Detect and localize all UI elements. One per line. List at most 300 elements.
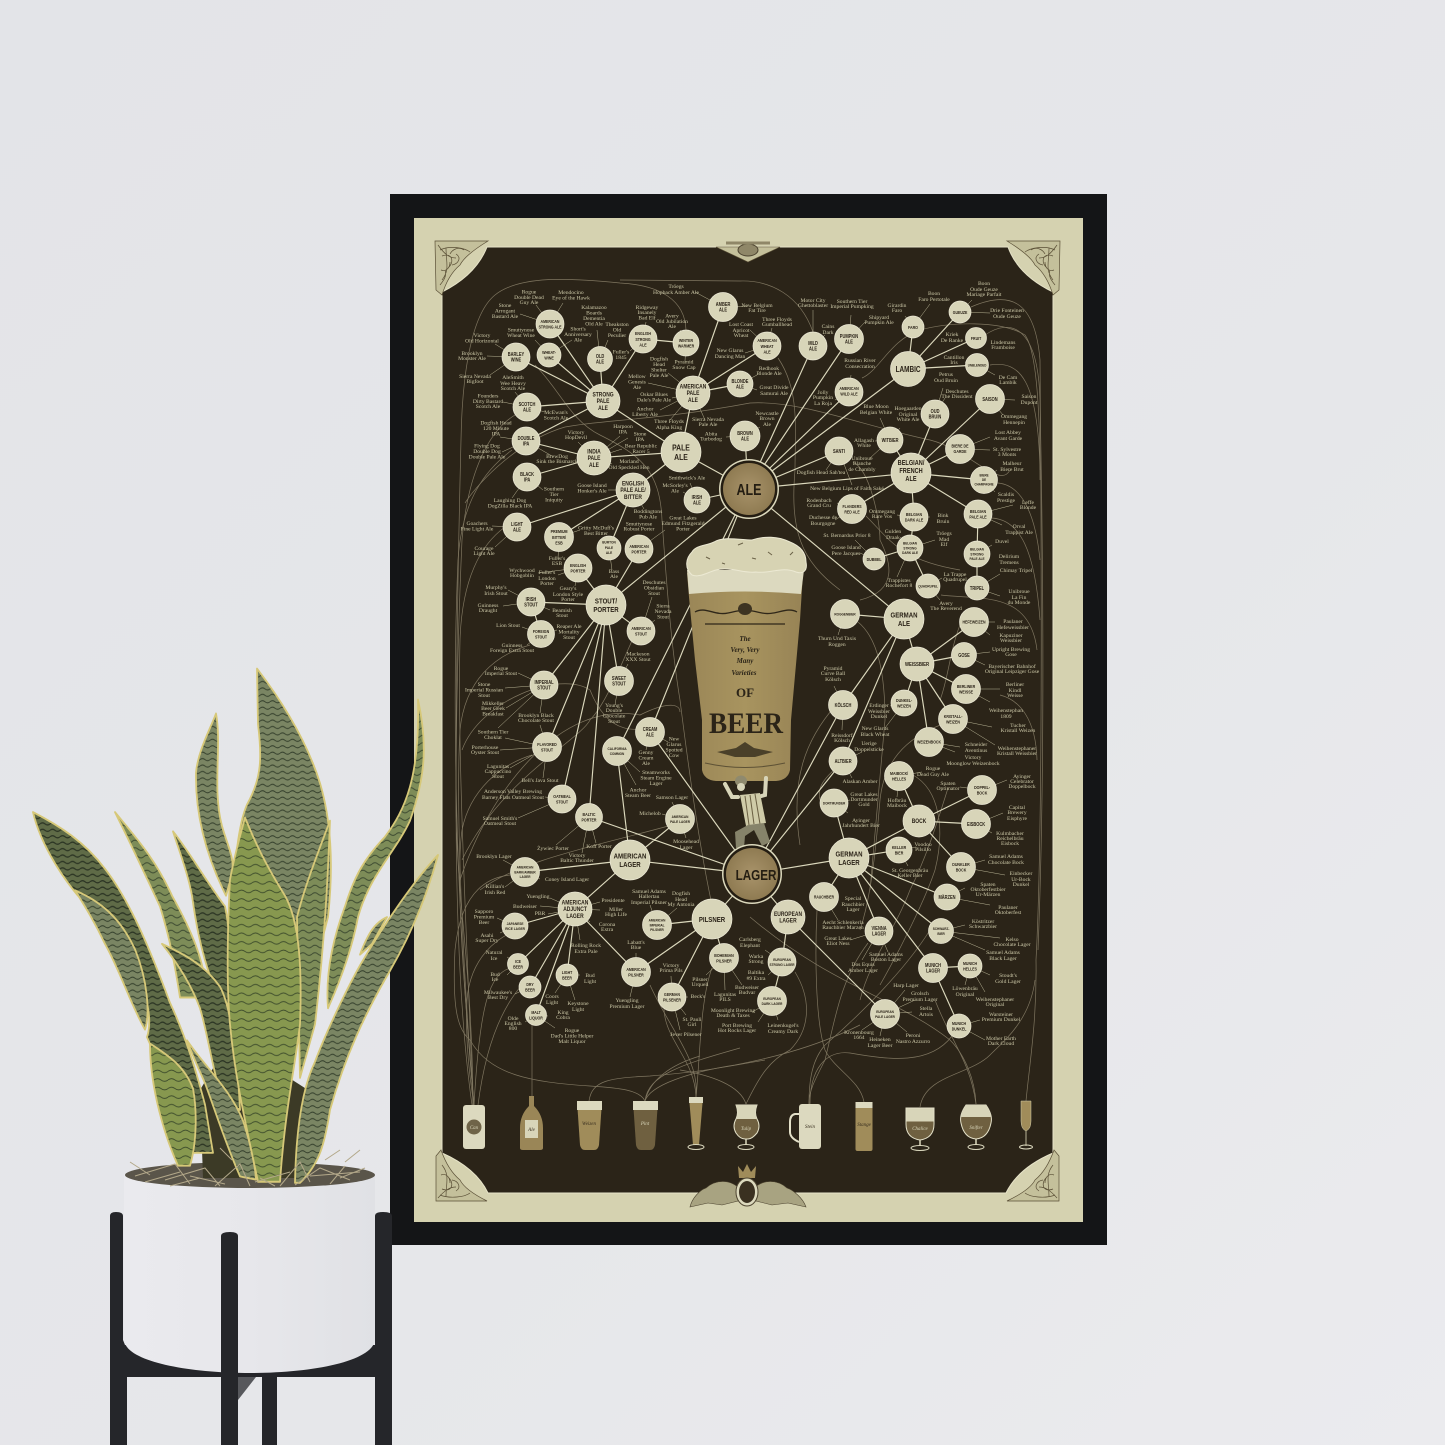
brand labels: belgian and french ales, lambics: Biere Brut bbox=[1000, 467, 1024, 473]
node: Kolsch: KÖLSCH bbox=[835, 701, 851, 708]
brand labels: ale branches upper left: Ale bbox=[671, 488, 680, 494]
brand labels: european and german lagers: Lager bbox=[846, 907, 860, 913]
brand labels: european and german lagers: Kulmbacher bbox=[996, 831, 1024, 837]
brand labels: belgian and french ales, lambics: Cains bbox=[822, 324, 834, 330]
node: Hefeweizen bbox=[960, 608, 988, 636]
brand labels: belgian and french ales, lambics: Avant Garde bbox=[994, 436, 1023, 442]
brand labels: ale branches upper left: Insanely bbox=[638, 310, 657, 316]
brand labels: belgian and french ales, lambics: La Trappe bbox=[944, 572, 967, 578]
potted snake plant bbox=[33, 669, 438, 1445]
brand labels: european and german lagers: Ayinger bbox=[1013, 774, 1031, 780]
brand labels: european and german lagers: Keller Bier bbox=[897, 873, 923, 879]
node: Saison: SAISON bbox=[982, 396, 998, 402]
brand labels: german ales and wheat beers: Berliner bbox=[1006, 682, 1024, 688]
node: Stout/Porter bbox=[586, 585, 626, 625]
brand labels: german ales and wheat beers: Gose bbox=[1005, 652, 1017, 658]
brand labels: european and german lagers: Eisbock bbox=[1001, 841, 1019, 847]
brand labels: stouts and porters: Anderson Valley Brewing bbox=[484, 789, 542, 795]
title text: Many bbox=[736, 657, 754, 665]
node: European Lager: EUROPEAN bbox=[774, 911, 802, 918]
brand labels: belgian and french ales, lambics: Rare Vos bbox=[872, 514, 892, 520]
brand labels: ale branches upper left: Theakston bbox=[605, 322, 629, 328]
brand labels: american lagers and pilsners: Dad's Little Helper bbox=[551, 1034, 593, 1040]
brand labels: belgian and french ales, lambics: Chimay Tripel bbox=[1000, 568, 1033, 574]
brand labels: belgian and french ales, lambics: Motor City bbox=[800, 298, 826, 304]
node: Unblended: UNBLENDED bbox=[968, 363, 987, 368]
corner ornament: top left bbox=[435, 241, 488, 295]
brand labels: ale branches upper left: Bad Elf bbox=[638, 314, 656, 322]
node: Belgian/French Ale: ALE bbox=[905, 475, 917, 483]
brand labels: american lagers and pilsners: Corona bbox=[599, 922, 616, 928]
node: Belgian Strong Dark Ale bbox=[897, 535, 923, 561]
node: Faro bbox=[902, 316, 924, 338]
node: Belgian Strong Dark Ale: DARK ALE bbox=[902, 551, 919, 555]
brand labels: european and german lagers: Black Lager bbox=[989, 956, 1017, 962]
brand labels: american lagers and pilsners: Light bbox=[572, 1007, 585, 1013]
node: Imperial Stout: IMPERIAL bbox=[534, 680, 554, 685]
brand labels: ale branches upper left: Monster Ale bbox=[458, 356, 486, 362]
node: Keller Bier: KELLER bbox=[892, 845, 906, 850]
node: Ice Beer bbox=[508, 954, 528, 974]
node: Belgian Strong Pale Ale bbox=[964, 541, 990, 567]
brand labels: ale branches upper left: Sierra Nevada bbox=[459, 374, 491, 380]
node: European Strong Lager: STRONG LAGER bbox=[770, 962, 795, 967]
brand labels: belgian and french ales, lambics: Rochefort 8 bbox=[886, 582, 912, 589]
node: Irish Ale: ALE bbox=[693, 500, 701, 506]
node: Irish Ale: IRISH bbox=[692, 495, 702, 500]
brand labels: belgian and french ales, lambics: Samurai Ale bbox=[760, 391, 788, 397]
brand labels: belgian and french ales, lambics: Ghettoblaster bbox=[798, 303, 828, 309]
node: Kristallweizen: WEIZEN bbox=[946, 719, 960, 725]
figure legs bbox=[735, 823, 770, 848]
node: Foreign Stout: STOUT bbox=[535, 634, 548, 640]
brand labels: european and german lagers: Dortmunder bbox=[850, 797, 878, 803]
brand labels: american lagers and pilsners: PILS bbox=[719, 997, 731, 1003]
brand labels: ale branches upper left: IPA bbox=[619, 430, 627, 436]
brand labels: american lagers and pilsners: Premium bbox=[474, 914, 495, 920]
brand labels: american lagers and pilsners: Brooklyn Lager bbox=[476, 854, 512, 860]
brand labels: stouts and porters: Oatmeal Stout bbox=[484, 821, 517, 827]
brand labels: ale branches upper left: Goose Island bbox=[577, 483, 607, 489]
glassware row bbox=[463, 1096, 1032, 1151]
node: Barley Wine bbox=[502, 343, 530, 371]
brand labels: ale branches upper left: Light Ale bbox=[473, 551, 495, 557]
brand labels: american lagers and pilsners: Victory bbox=[663, 963, 680, 969]
brand labels: european and german lagers: Brewery bbox=[1007, 810, 1027, 816]
title text: The bbox=[739, 635, 751, 643]
poster mat bbox=[414, 218, 1083, 1222]
brand labels: german ales and wheat beers: Victory bbox=[965, 755, 982, 761]
brand labels: american lagers and pilsners: Rolling Rock bbox=[571, 943, 601, 949]
brand labels: american lagers and pilsners: Strong bbox=[749, 959, 764, 965]
node: English Strong Ale: ALE bbox=[639, 342, 647, 348]
brand labels: german ales and wheat beers: Original Leipziger Gose bbox=[985, 669, 1040, 675]
brand labels: belgian and french ales, lambics: St. Bernardus Prior 8 bbox=[823, 533, 871, 539]
plant pot body bbox=[124, 1174, 375, 1373]
node: European Dark Lager: DARK LAGER bbox=[762, 1001, 783, 1006]
node: American Strong Ale bbox=[536, 310, 564, 338]
node: Dunkelweizen: DUNKEL- bbox=[896, 698, 913, 703]
brand labels: european and german lagers: Amber Lager bbox=[848, 968, 878, 974]
brand labels: ale branches upper left: Wee Heavy bbox=[500, 381, 526, 387]
brand labels: american lagers and pilsners: Beer bbox=[479, 920, 489, 926]
brand labels: american lagers and pilsners: High Life bbox=[605, 911, 627, 918]
node: Light Ale: ALE bbox=[513, 527, 521, 533]
brand labels: stouts and porters: Lager bbox=[679, 845, 693, 851]
brand labels: belgian and french ales, lambics: Pumpkin Ale bbox=[864, 320, 894, 326]
node: California Common: COMMON bbox=[610, 751, 625, 756]
brand labels: ale branches upper left: 120 Minute bbox=[483, 426, 509, 432]
brand labels: belgian and french ales, lambics: New Belgium bbox=[741, 303, 773, 309]
node: Eisbock: EISBOCK bbox=[967, 821, 986, 827]
node: Strong Pale Ale: STRONG bbox=[592, 392, 614, 399]
pot soil bbox=[125, 1162, 375, 1188]
brand labels: american lagers and pilsners: Budweiser bbox=[735, 985, 759, 991]
node: Black IPA: IPA bbox=[524, 477, 531, 483]
brand labels: ale branches upper left: Southern bbox=[544, 486, 564, 492]
node: American Barkamber Lager bbox=[510, 858, 540, 886]
brand labels: ale branches upper left: Great Lakes bbox=[669, 516, 697, 522]
node: Strong Pale Ale: PALE bbox=[597, 399, 610, 405]
node: Flanders Red Ale bbox=[838, 494, 866, 524]
brand labels: belgian and french ales, lambics: Lindemans bbox=[991, 340, 1015, 346]
node: Barley Wine: BARLEY bbox=[508, 352, 524, 357]
node: American Wheat Ale: ALE bbox=[763, 349, 771, 355]
brand labels: european and german lagers: Grolsch bbox=[911, 991, 929, 997]
icon: bottle: Ale bbox=[527, 1128, 536, 1133]
soil twigs bbox=[130, 1148, 365, 1186]
node: American Pale Ale: AMERICAN bbox=[680, 384, 706, 391]
node: Belgian/French Ale: BELGIAN/ bbox=[898, 459, 925, 467]
brand labels: european and german lagers: Chocolate Bock bbox=[988, 860, 1024, 866]
icon: pilsner glass bbox=[688, 1097, 704, 1150]
brand labels: belgian and french ales, lambics: Ale bbox=[763, 422, 772, 428]
node: American Imperial Pilsner: IMPERIAL bbox=[650, 923, 665, 928]
brand labels: german ales and wheat beers: Curve Ball bbox=[821, 671, 846, 677]
brand labels: european and german lagers: Boston Lager bbox=[871, 957, 901, 963]
brand labels: european and german lagers: 1664 bbox=[853, 1035, 865, 1041]
icon: weizen glass: Weizen bbox=[582, 1122, 596, 1127]
top crest ornament bbox=[716, 243, 780, 262]
brand labels: stouts and porters: Obsidian bbox=[644, 586, 664, 592]
node: Roggenbier bbox=[830, 600, 860, 628]
brand labels: ale branches upper left: Anniversary bbox=[564, 332, 592, 338]
brand labels: belgian and french ales, lambics: 3 Monts bbox=[998, 452, 1016, 458]
node: Burton Pale Ale: PALE bbox=[605, 545, 614, 550]
node: Unblended bbox=[966, 354, 988, 376]
icon: tulip glass: Tulip bbox=[741, 1127, 752, 1132]
brand labels: belgian and french ales, lambics: Blonde Ale bbox=[756, 371, 782, 377]
node: Irish Ale bbox=[684, 487, 710, 513]
brand labels: american lagers and pilsners: PBR bbox=[535, 911, 546, 917]
glass body bbox=[687, 573, 803, 781]
node: American Imperial Pilsner: PILSNER bbox=[650, 928, 664, 932]
brand labels: european and german lagers: Stoudt's bbox=[999, 973, 1017, 979]
brand labels: ale branches upper left: Snow Cap bbox=[672, 365, 696, 371]
brand labels: belgian and french ales, lambics: Dogfish Head Sah'tea bbox=[797, 469, 846, 476]
brand labels: belgian and french ales, lambics: Oude Geuze bbox=[993, 314, 1021, 320]
node: Quadrupel: QUADRUPEL bbox=[918, 584, 939, 589]
node: American Wild Ale bbox=[835, 378, 863, 406]
node: European Pale Lager: EUROPEAN bbox=[876, 1010, 894, 1014]
brand labels: european and german lagers: Dos Equis bbox=[851, 962, 875, 968]
brand labels: belgian and french ales, lambics: Pumpkin bbox=[813, 395, 833, 401]
brand labels: stouts and porters: Lion Stout bbox=[496, 623, 520, 629]
node: European Pale Lager: PALE LAGER bbox=[875, 1014, 895, 1019]
brand labels: american lagers and pilsners: Irish Red bbox=[485, 890, 506, 896]
node: Belgian Strong Dark Ale: BELGIAN bbox=[903, 541, 917, 546]
brand labels: stouts and porters: Ale bbox=[610, 574, 619, 580]
brand labels: belgian and french ales, lambics: Original bbox=[899, 412, 918, 418]
brand labels: belgian and french ales, lambics: St. Sylvestre bbox=[993, 447, 1022, 453]
brand labels: belgian and french ales, lambics: Quadrupel bbox=[943, 577, 967, 583]
brand labels: german ales and wheat beers: Bayerischer Bahnhof bbox=[988, 663, 1036, 670]
node: Faro: FARO bbox=[908, 324, 918, 330]
brand labels: belgian and french ales, lambics: Southern Tier bbox=[837, 299, 867, 305]
leaves bbox=[33, 669, 438, 1183]
node: Dunkler Bock: DUNKLER bbox=[952, 862, 970, 867]
node: Foreign Stout bbox=[528, 620, 554, 648]
node: Santi: SANTI bbox=[833, 448, 845, 454]
brand labels: belgian and french ales, lambics: Drie Fonteinen bbox=[990, 308, 1024, 314]
node: India Pale Ale: ALE bbox=[589, 463, 599, 469]
brand labels: stouts and porters: Samson Lager bbox=[656, 795, 688, 801]
brand labels: german ales and wheat beers: Aventinus bbox=[965, 748, 987, 754]
brand labels: belgian and french ales, lambics: Oud Bruin bbox=[934, 378, 958, 384]
node: Stout/Porter: STOUT/ bbox=[595, 598, 617, 606]
brand labels: belgian and french ales, lambics: Belgian White bbox=[860, 410, 893, 416]
brand labels: german ales and wheat beers: Paulaner bbox=[1003, 619, 1023, 625]
brand labels: european and german lagers: Spaten bbox=[940, 781, 956, 787]
brand labels: american lagers and pilsners: Light bbox=[546, 1000, 559, 1006]
brand labels: american lagers and pilsners bbox=[474, 854, 766, 1045]
brand labels: ale branches upper left: Harpoon bbox=[613, 424, 633, 430]
node: American Adjunct Lager: AMERICAN bbox=[562, 900, 588, 907]
brand labels: stouts and porters: Bass bbox=[609, 569, 619, 575]
brand labels: ale branches upper left: Kalamazoo bbox=[581, 305, 607, 311]
node: Pilsner: PILSNER bbox=[699, 916, 725, 924]
node: English Pale Ale/Bitter: PALE ALE/ bbox=[620, 488, 646, 494]
node: American Wheat Ale: AMERICAN bbox=[757, 338, 777, 343]
brand labels: american lagers and pilsners: Head bbox=[675, 897, 687, 903]
node: Oud Bruin: OUD bbox=[931, 409, 940, 414]
poster frame bbox=[390, 194, 1107, 1245]
brand labels: ale branches upper left: Dogfish bbox=[650, 356, 668, 362]
icon: stange glass: Stange bbox=[857, 1123, 872, 1128]
node: German Pilsener: GERMAN bbox=[664, 992, 680, 997]
brand labels: stouts and porters: Steamworks bbox=[642, 770, 670, 776]
node: Japanese Rice Lager: RICE LAGER bbox=[505, 927, 525, 931]
brand labels: american lagers and pilsners: Asahi bbox=[480, 933, 494, 939]
brand labels: american lagers and pilsners: Moonlight Brewing bbox=[711, 1008, 755, 1014]
brand labels: ale branches upper left: Old bbox=[613, 328, 621, 334]
brand labels: european and german lagers: Original bbox=[956, 992, 975, 998]
node: English Porter: ENGLISH bbox=[570, 563, 586, 568]
brand labels: belgian and french ales, lambics: Shipyard bbox=[869, 315, 889, 321]
icon: flute bbox=[1020, 1101, 1032, 1149]
node: American Stout bbox=[627, 617, 655, 645]
brand labels: stouts and porters: Young's bbox=[605, 703, 623, 709]
node: Dry Beer: DRY bbox=[526, 982, 534, 987]
node: Scotch Ale: SCOTCH bbox=[519, 402, 535, 407]
node: Dunkelweizen bbox=[891, 690, 917, 716]
title text: Very, Very bbox=[731, 646, 760, 654]
node: American Adjunct Lager bbox=[558, 892, 592, 926]
brand labels: ale branches upper left: Pub Ale bbox=[639, 514, 657, 520]
LAGER hub bbox=[722, 844, 782, 904]
brand labels: ale branches upper left: Double Pale Ale bbox=[469, 454, 506, 460]
brand labels: stouts and porters: Porterhouse bbox=[472, 745, 499, 751]
brand labels: stouts and porters: Anchor bbox=[630, 788, 647, 794]
node: Japanese Rice Lager: JAPANESE bbox=[507, 922, 524, 926]
brand labels: american lagers and pilsners: Warka bbox=[749, 954, 764, 960]
brand labels: german ales and wheat beers bbox=[818, 619, 1040, 767]
brand labels: belgian and french ales, lambics: Gumballhead bbox=[762, 322, 792, 328]
brand labels: ale branches upper left: Peculier bbox=[608, 333, 626, 339]
brand labels: ale branches upper left: Robust Porter bbox=[624, 526, 655, 532]
brand labels: german ales and wheat beers: Kristall Weizen bbox=[1001, 728, 1036, 734]
icon: stange glass bbox=[856, 1102, 872, 1151]
brand labels: belgian and french ales, lambics: The Reverend bbox=[930, 606, 962, 612]
node: Keller Bier bbox=[886, 837, 912, 863]
plant stand front post bbox=[221, 1232, 238, 1445]
brand labels: belgian and french ales, lambics: du Monde bbox=[1008, 600, 1031, 606]
node: Maibock/Helles: HELLES bbox=[892, 776, 906, 782]
brand labels: belgian and french ales, lambics: Blanche bbox=[853, 461, 872, 467]
brand labels: german ales and wheat beers: Kölsch bbox=[825, 677, 841, 683]
node: India Pale Ale bbox=[577, 441, 611, 475]
brand labels: american lagers and pilsners: Port Brewing bbox=[722, 1023, 752, 1029]
strongman figure holding the glass bbox=[725, 776, 770, 848]
node: Berliner Weisse: WEISSE bbox=[959, 689, 973, 695]
node: Altbier bbox=[829, 747, 857, 775]
brand labels: european and german lagers: Aecht Schlenkerla bbox=[822, 920, 864, 926]
node: American Adjunct Lager: ADJUNCT bbox=[563, 907, 587, 913]
brand labels: ale branches upper left: Best Bitter bbox=[584, 531, 608, 537]
brand labels: stouts and porters: Irish Stout bbox=[484, 591, 508, 597]
node: Wheat Wine: WHEAT- bbox=[542, 350, 557, 355]
brand labels: belgian and french ales, lambics: White Ale bbox=[897, 417, 920, 423]
icon: snifter bbox=[961, 1105, 991, 1150]
brand labels: belgian and french ales, lambics: New Belgium Lips of Faith Saké bbox=[810, 485, 884, 492]
brand labels: stouts and porters: Chocolate Stout bbox=[518, 718, 554, 724]
brand labels: ale branches upper left: Dale's Pale Ale bbox=[637, 398, 671, 404]
brand labels: stouts and porters: Mortality bbox=[558, 630, 580, 636]
brand labels: belgian and french ales, lambics: Rodenbach bbox=[806, 498, 832, 504]
node: Quadrupel bbox=[916, 574, 940, 598]
node: Gueuze: GUEUZE bbox=[953, 309, 968, 315]
brand labels: ale branches upper left: Fuller's bbox=[549, 556, 565, 562]
brand labels: german ales and wheat beers: Schneider bbox=[965, 742, 987, 748]
brand labels: american lagers and pilsners: Baltika bbox=[748, 970, 765, 976]
brand labels: american lagers and pilsners: Elephant bbox=[740, 943, 760, 949]
brand labels: ale branches upper left: Oskar Blues bbox=[640, 392, 668, 398]
brand labels: american lagers and pilsners: Hallertau bbox=[639, 894, 660, 900]
brand labels: belgian and french ales, lambics: Lambik bbox=[999, 380, 1017, 386]
node: American Porter bbox=[625, 535, 653, 563]
brand labels: stouts and porters: New bbox=[669, 736, 680, 742]
node: Malt Liquor bbox=[526, 1004, 546, 1026]
brand labels: ale branches upper left: Fuller's bbox=[613, 350, 629, 356]
brand labels: belgian and french ales, lambics: Bink bbox=[938, 513, 949, 519]
node: India Pale Ale: INDIA bbox=[587, 449, 601, 456]
node: German Pilsener: PILSENER bbox=[663, 997, 681, 1003]
brand labels: stouts and porters: Żywiec Porter bbox=[537, 845, 569, 852]
brand labels: ale branches upper left: Brooklyn bbox=[461, 351, 483, 357]
brand labels: belgian and french ales, lambics: La Roja bbox=[814, 401, 832, 407]
brand labels: american lagers and pilsners: Bud bbox=[585, 973, 595, 979]
brand labels: european and german lagers: Reissdorf bbox=[831, 732, 853, 739]
brand labels: stouts and porters: Guinness bbox=[478, 603, 498, 609]
brand labels: ale branches upper left: Ridgeway bbox=[636, 305, 659, 311]
brand labels: american lagers and pilsners: Beck's bbox=[691, 994, 705, 1000]
brand labels: european and german lagers: Doppelsticke bbox=[854, 747, 884, 753]
node: Weizenbock: WEIZENBOCK bbox=[917, 739, 941, 745]
brand labels: belgian and french ales, lambics: Hennepin bbox=[1003, 420, 1025, 426]
node: California Common bbox=[602, 736, 632, 766]
brand labels: belgian and french ales, lambics: Mariage Parfait bbox=[967, 291, 1002, 298]
node: Burton Pale Ale: ALE bbox=[606, 551, 613, 555]
node: Bock bbox=[903, 805, 935, 837]
node: Burton Pale Ale: BURTON bbox=[602, 540, 616, 545]
node: Dortmunder: DORTMUNDER bbox=[823, 801, 846, 806]
brand labels: ale branches upper left: Wheat Wine bbox=[507, 333, 535, 339]
node: Flavored Stout: STOUT bbox=[541, 747, 554, 753]
node: Japanese Rice Lager bbox=[502, 913, 528, 939]
brand labels: belgian and french ales, lambics: Mad bbox=[939, 537, 949, 543]
brand labels: stouts and porters: Moosehead bbox=[673, 839, 699, 845]
node: European Lager: LAGER bbox=[779, 918, 797, 925]
brand labels: ale branches upper left: Head bbox=[653, 362, 665, 368]
brand labels: american lagers and pilsners: Malt Liquor bbox=[558, 1039, 586, 1045]
brand labels: belgian and french ales, lambics: Leffe bbox=[1022, 499, 1035, 506]
brand labels: stouts and porters: Reaper Ale bbox=[556, 624, 582, 630]
brand labels: european and german lagers: Reichelbräu bbox=[996, 836, 1024, 842]
node: American Porter: PORTER bbox=[632, 549, 647, 555]
node: Rauchbier bbox=[810, 882, 838, 912]
brand labels: ale branches upper left: Iniquity bbox=[545, 498, 563, 504]
node: American Pale Lager: AMERICAN bbox=[672, 815, 689, 819]
figure arms and head bbox=[725, 778, 766, 797]
brand labels: american lagers and pilsners: Bud bbox=[490, 972, 500, 978]
brand labels: european and german lagers: Oktoberfest bbox=[995, 909, 1022, 916]
brand labels: belgian and french ales, lambics: Allagash bbox=[854, 438, 874, 444]
brand labels: ale branches upper left: Sierra Nevada bbox=[692, 417, 724, 423]
brand labels: american lagers and pilsners: Ice bbox=[491, 956, 498, 962]
brand labels: belgian and french ales, lambics: Deschutes bbox=[946, 389, 968, 395]
brand labels: european and german lagers: Köstritzer bbox=[972, 919, 994, 925]
brand labels: ale branches upper left: Shelter bbox=[651, 368, 667, 374]
node: American Barkamber Lager: LAGER bbox=[520, 875, 531, 879]
brand labels: ale branches upper left: Mellow bbox=[628, 374, 647, 380]
brand labels: european and german lagers: Löwenbräu bbox=[952, 986, 978, 992]
brand labels: european and german lagers: Heineken bbox=[869, 1037, 891, 1043]
brand labels: european and german lagers: Warsteiner bbox=[989, 1012, 1013, 1018]
node: Maibock/Helles bbox=[884, 762, 914, 790]
brand labels: ale branches upper left: Liberty Ale bbox=[632, 412, 658, 418]
brand labels: belgian and french ales, lambics bbox=[653, 281, 1038, 612]
node: Irish Stout bbox=[517, 588, 545, 616]
figure striped vest bbox=[740, 793, 766, 826]
brand labels: german ales and wheat beers: Erdinger bbox=[869, 703, 889, 709]
brand labels: ale branches upper left: Tier bbox=[549, 492, 559, 498]
brand labels: belgian and french ales, lambics: Lost Coast bbox=[729, 322, 753, 328]
node: American Pilsner bbox=[622, 958, 650, 986]
node: European Lager bbox=[771, 900, 805, 934]
node: Old Ale bbox=[588, 346, 612, 372]
brand labels: american lagers and pilsners: King bbox=[557, 1010, 569, 1016]
brand labels: american lagers and pilsners: Imperial Pilsner bbox=[631, 900, 667, 906]
